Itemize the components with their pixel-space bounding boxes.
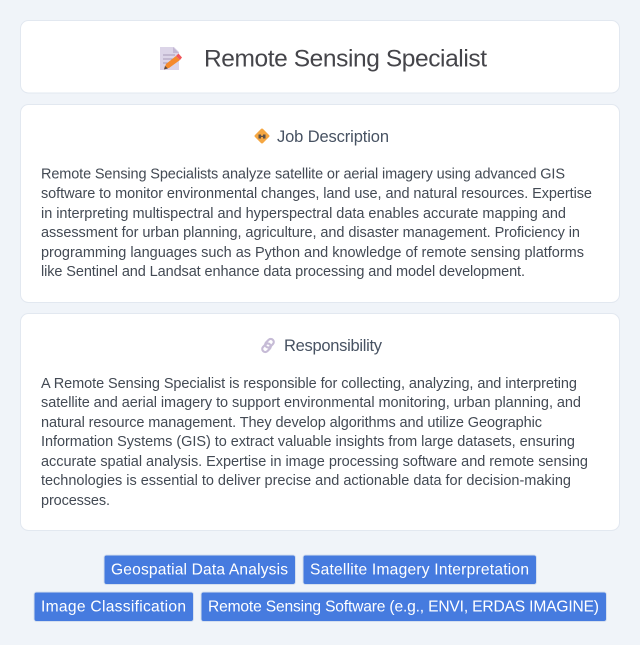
text block: responsibility: A Remote Sensing Specialist is responsible for collecting, analyzing, and interpreting bbox=[41, 376, 577, 392]
panel: responsibility bbox=[20, 314, 620, 530]
text block: job description: programming languages such as Python and knowledge of remote sensing platforms bbox=[41, 245, 584, 261]
text block: responsibility: accurate spatial analysis. Expertise in image processing software and remote sensing bbox=[41, 454, 588, 470]
icon: link bbox=[261, 338, 275, 353]
text block: responsibility: natural resource management. They develop algorithms and utilize Geographic bbox=[41, 415, 542, 431]
text block: responsibility: processes. bbox=[41, 493, 110, 509]
text block: job description bbox=[41, 167, 592, 280]
skill tag: geospatial data analysis bbox=[104, 555, 296, 584]
skill tag: image classification bbox=[34, 592, 194, 622]
skill tag: satellite imagery interpretation: Satellite Imagery Interpretation bbox=[310, 562, 529, 578]
icon: orange diamond bbox=[254, 128, 270, 144]
text block: job description: assessment for urban planning, agriculture, and disaster management. Proficiency in bbox=[41, 225, 580, 241]
heading: job description: Job Description bbox=[277, 128, 389, 146]
icon: memo and pencil bbox=[160, 47, 182, 70]
text block: job description: in interpreting multispectral and hyperspectral data enables accurate mapping and bbox=[41, 206, 566, 222]
text block: responsibility bbox=[41, 376, 588, 509]
heading: responsibility: Responsibility bbox=[284, 337, 383, 355]
panel: title card bbox=[20, 20, 620, 93]
text block: responsibility: Information Systems (GIS) to extract valuable insights from large datasets, ensuring bbox=[41, 434, 575, 450]
title: Remote Sensing Specialist bbox=[204, 46, 487, 72]
panel: job description bbox=[20, 104, 620, 302]
text block: responsibility: technologies is essential to deliver precise and actionable data for decision-making bbox=[41, 473, 571, 489]
text block: job description: Remote Sensing Specialists analyze satellite or aerial imagery using advanced GIS bbox=[41, 167, 565, 183]
text block: job description: like Sentinel and Landsat enhance data processing and model development. bbox=[41, 264, 525, 280]
skill tag: image classification: Image Classification bbox=[41, 598, 186, 616]
skill tag: geospatial data analysis: Geospatial Data Analysis bbox=[111, 562, 288, 578]
text block: responsibility: satellite and aerial imagery to support environmental monitoring, urban planning, and bbox=[41, 395, 581, 411]
skill tag: remote sensing software: Remote Sensing Software (e.g., ENVI, ERDAS IMAGINE) bbox=[208, 598, 599, 616]
text block: job description: software to monitor environmental changes, land use, and natural resources. Expertise bbox=[41, 186, 592, 202]
skill tag: remote sensing software bbox=[201, 592, 606, 622]
skill tag: satellite imagery interpretation bbox=[303, 555, 536, 584]
